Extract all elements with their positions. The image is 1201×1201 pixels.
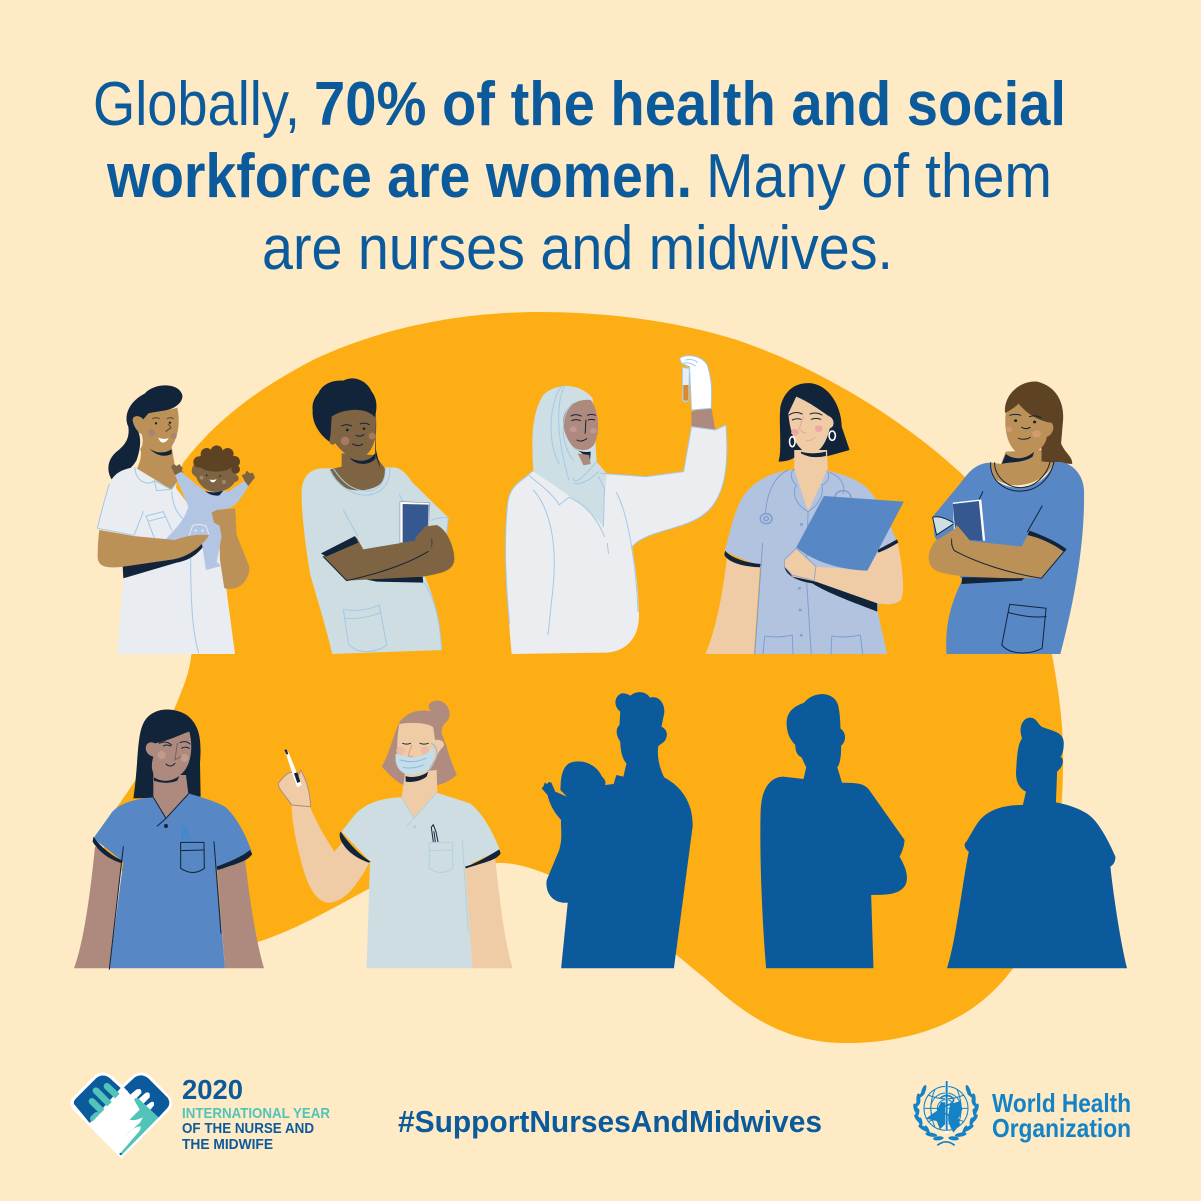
figure: nurse with mask and thermometer <box>278 701 513 968</box>
silhouette: person holding baby <box>542 692 693 968</box>
title <box>93 70 1066 283</box>
figure: nurse with crossed arms and book, blue <box>929 382 1084 654</box>
title: 70% of the health and social <box>314 70 1066 139</box>
logo text: INTERNATIONAL YEAR <box>182 1105 330 1122</box>
logo text: OF THE NURSE AND <box>182 1120 314 1137</box>
logo text: THE MIDWIFE <box>182 1136 273 1153</box>
silhouette: person with crossed arms <box>760 694 907 968</box>
title: Globally, <box>93 70 300 139</box>
logo text: 2020 <box>182 1074 243 1105</box>
figure: nurse with crossed arms and book, light blue <box>302 378 454 654</box>
logo text <box>992 1088 1131 1143</box>
logo text <box>182 1074 330 1153</box>
orange background blob <box>100 312 1063 1043</box>
title: Many of them <box>706 142 1052 211</box>
logo text: Organization <box>992 1113 1131 1143</box>
logo text: World Health <box>992 1088 1131 1118</box>
hashtag: #SupportNursesAndMidwives <box>398 1104 822 1139</box>
icon: heart with hands <box>70 1072 172 1159</box>
silhouette: person with wide shoulders <box>947 718 1127 968</box>
logo: International Year of the Nurse and the Midwife <box>70 1072 330 1159</box>
figure: nurse with long dark hair in blue scrubs <box>74 710 264 969</box>
logo: World Health Organization <box>912 1081 1131 1145</box>
figure: scientist in hijab raising test tube <box>506 356 727 654</box>
figure: nurse holding baby <box>97 385 255 654</box>
figure: nurse with stethoscope and clipboard <box>705 383 904 654</box>
title: are nurses and midwives. <box>262 214 893 283</box>
icon: WHO emblem <box>912 1081 980 1145</box>
title: workforce are women. <box>106 142 692 211</box>
